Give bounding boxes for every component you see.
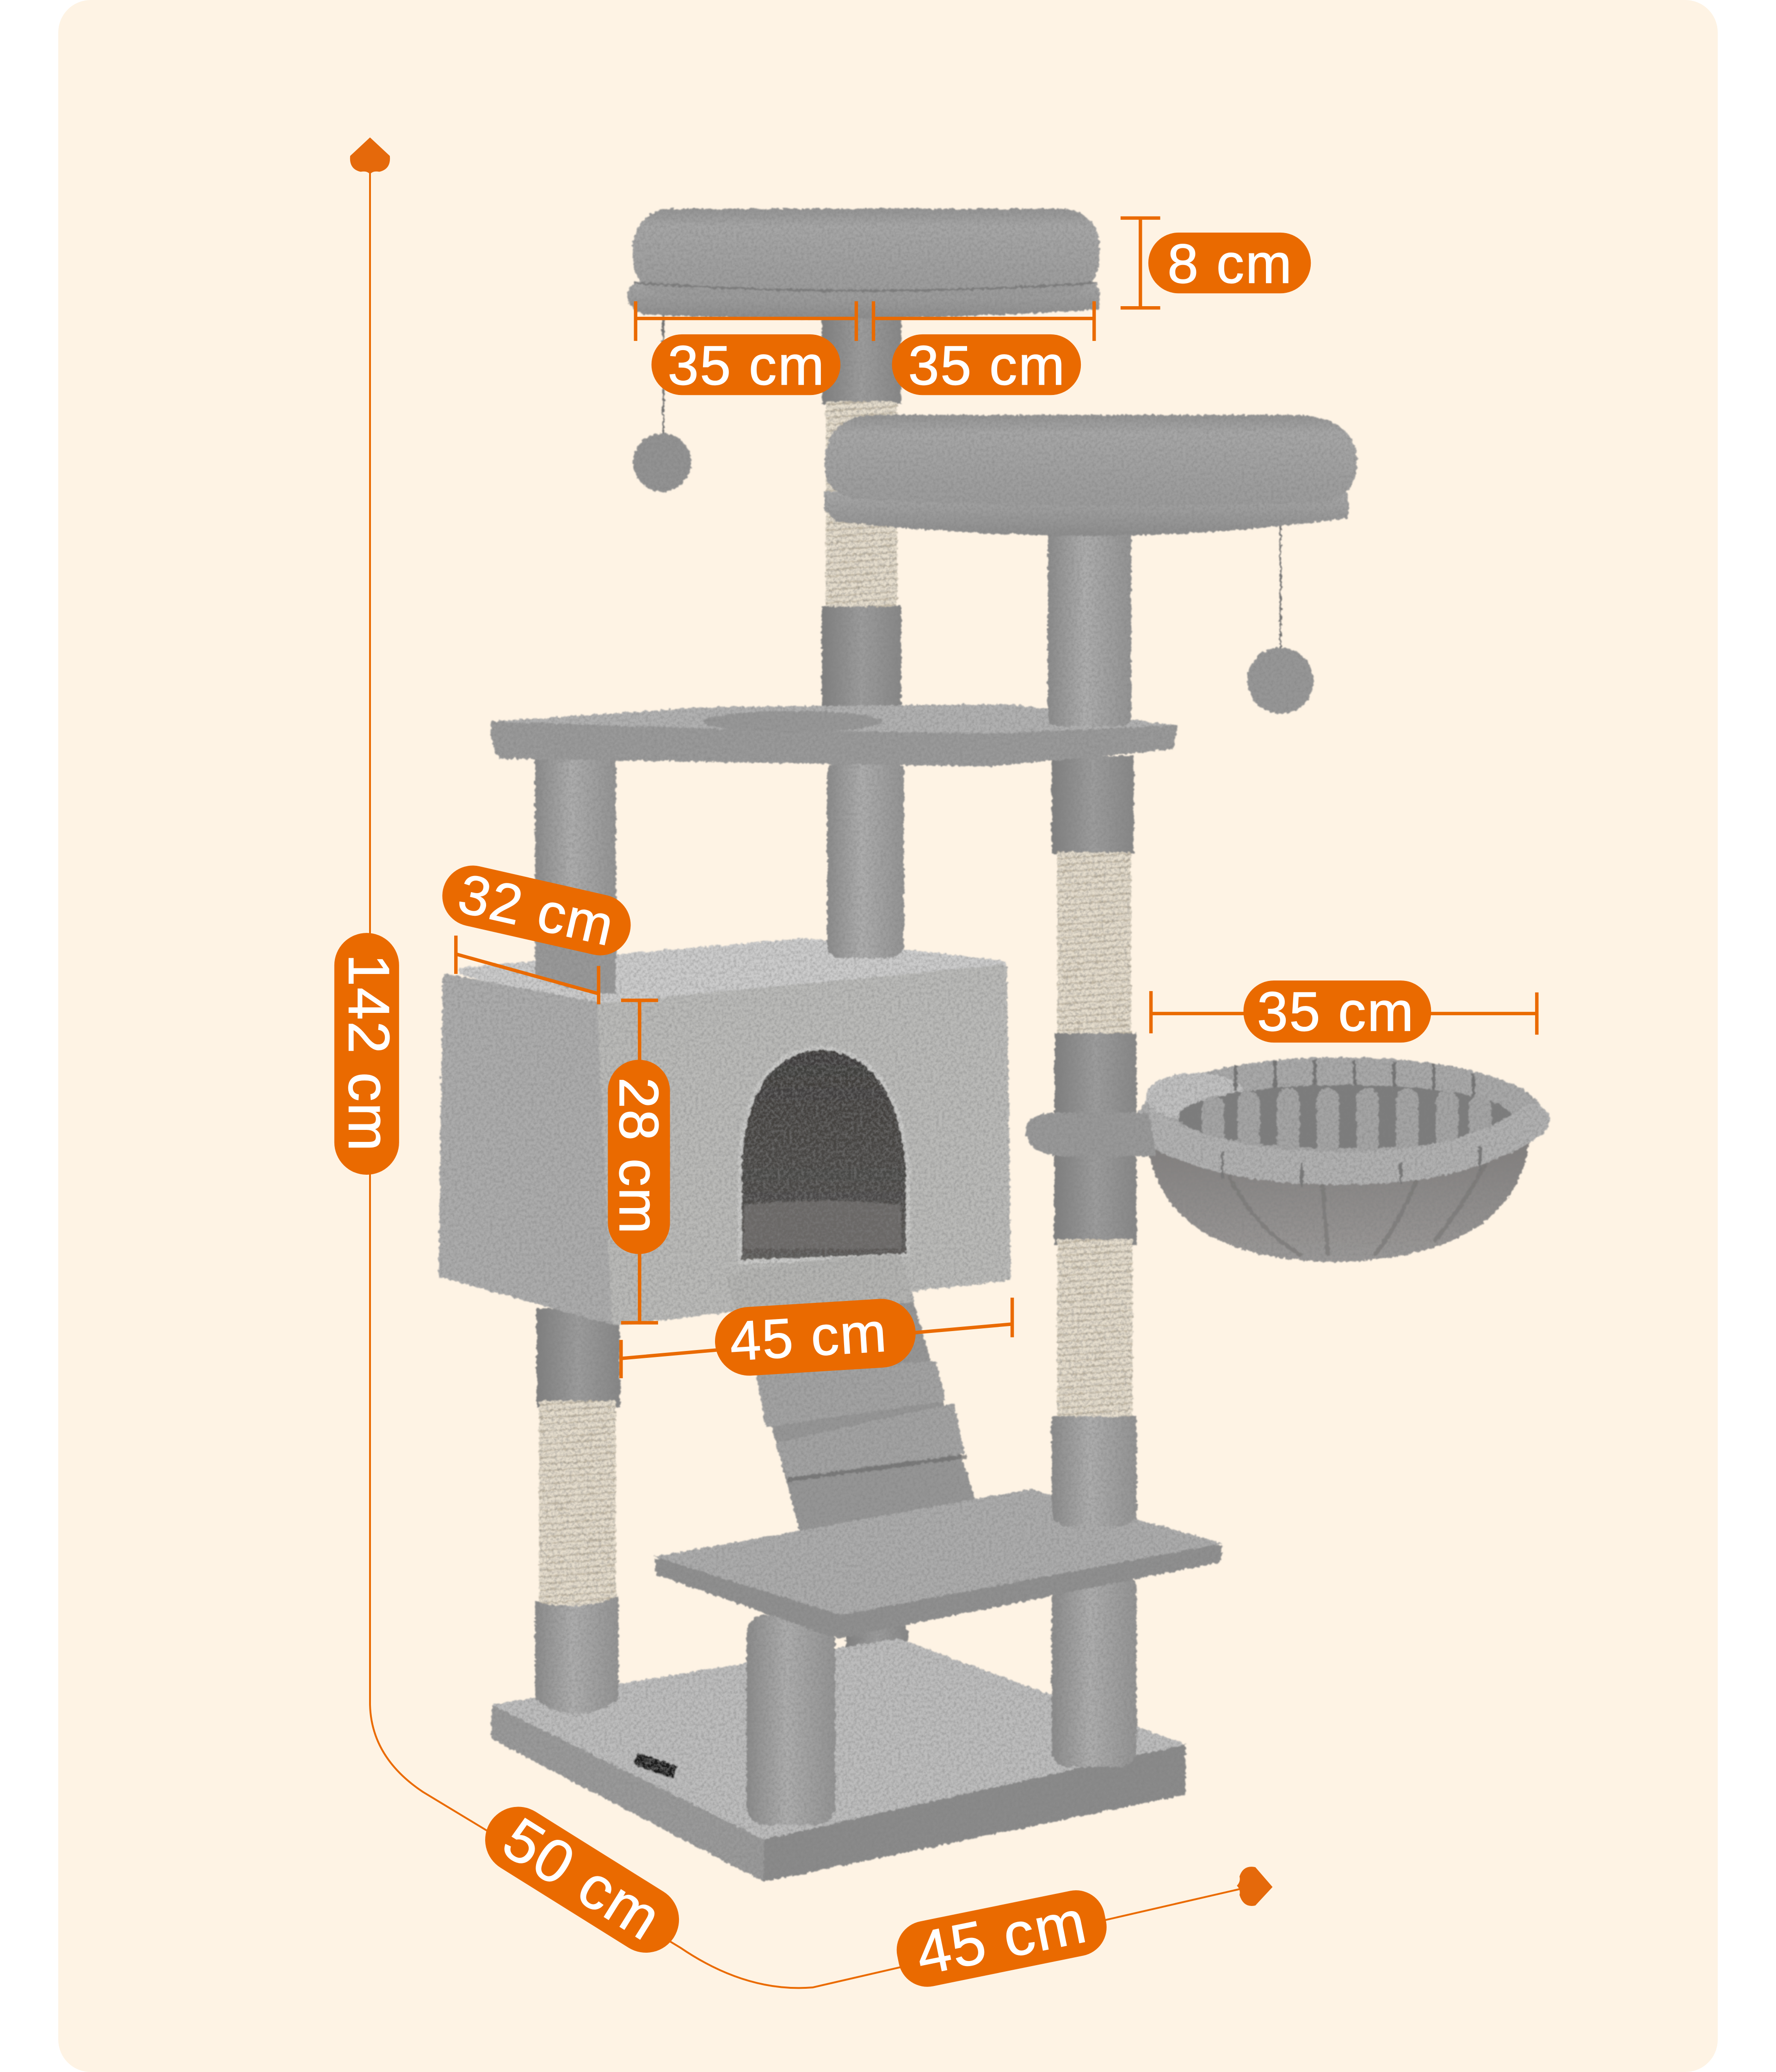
dimension: top bed height 8 cm: 8 cm [1167,233,1293,295]
house doorway [740,1048,908,1262]
dimension: hammock 35 cm [1151,980,1537,1043]
dimension: house width 45 cm: 45 cm [728,1301,889,1373]
dimension: hammock 35 cm: 35 cm [1257,981,1415,1043]
dimension: house depth 32 cm [436,860,637,1004]
dimension: house depth 32 cm: 32 cm [453,862,620,958]
arrow head: right [1237,1867,1272,1906]
dimension: top bed 35 cm right: 35 cm [908,334,1066,396]
dimension: top bed 35 cm left: 35 cm [668,334,826,396]
dimension: top bed height 8 cm [1121,218,1311,308]
main dimension path [350,137,1272,1988]
arrow head: top [350,137,390,174]
cat tree [443,209,1542,1882]
middle platform [491,661,1178,965]
brand tag [633,1752,678,1779]
hammock [1025,1057,1542,1262]
dimension: top bed 35 cm left [635,301,856,396]
upper right post [1048,526,1131,731]
house [443,892,1007,1536]
second bed [825,415,1357,536]
central post [822,309,901,712]
base board [492,1619,1185,1882]
dimension: house width 45 cm [621,1297,1012,1378]
right column [1052,756,1136,1536]
dimension: top bed 35 cm right [874,301,1094,396]
label: 45 cm width: 45 cm [910,1887,1092,1988]
step platform [654,1440,1222,1825]
left lower post [535,1308,620,1714]
right post lower [1052,1572,1136,1767]
top bed [628,209,1099,319]
label: 50 cm depth: 50 cm [492,1804,674,1953]
dimension: house height 28 cm [608,1000,670,1323]
dimension: house height 28 cm: 28 cm [608,1077,670,1235]
house posts through roof [535,912,616,994]
label: 142 cm height: 142 cm [336,954,401,1153]
ramp [726,1255,978,1536]
pom-pom strings [633,314,1314,714]
